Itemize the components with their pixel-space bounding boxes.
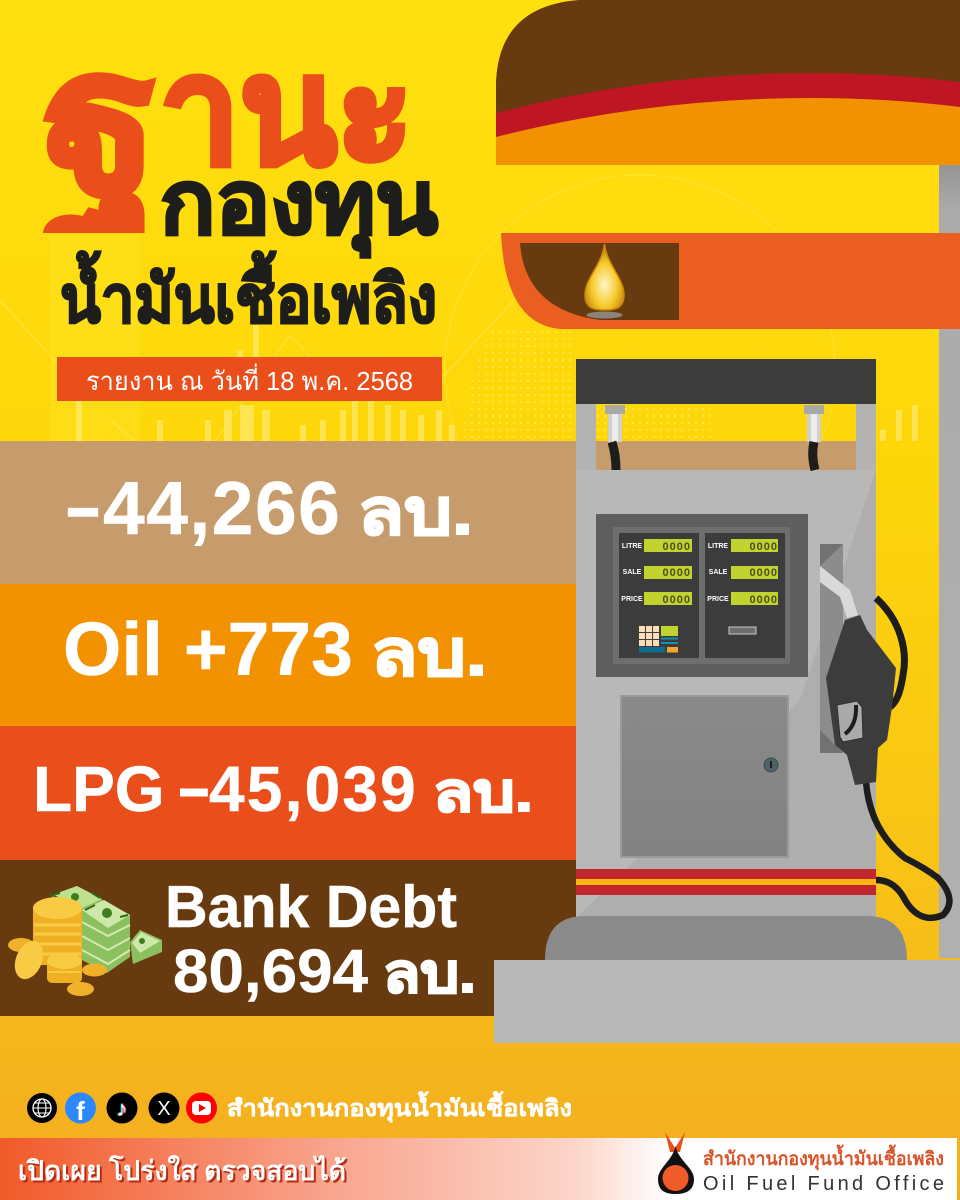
panel: bank debt: Bank Debt xyxy=(165,874,457,940)
display panel: LITRE xyxy=(622,543,642,550)
hose connectors xyxy=(605,405,824,470)
display panel: SALE xyxy=(709,569,728,576)
display panel: PRICE xyxy=(707,596,729,603)
logo: oil drop and flame xyxy=(658,1132,694,1194)
logo: Thai name: สำนักงานกองทุนน้ำมันเชื้อเพลิง xyxy=(703,1144,944,1171)
panel: net fund status xyxy=(0,441,576,584)
slogan: เปิดเผย โปร่งใส ตรวจสอบได้ xyxy=(20,1156,348,1188)
cabinet door xyxy=(621,696,788,857)
icon: website xyxy=(27,1093,57,1123)
title word: status xyxy=(42,72,406,233)
display panel: 0000 xyxy=(663,541,691,553)
pump cap xyxy=(576,359,876,404)
display panel: SALE xyxy=(623,569,642,576)
display panel: 0000 xyxy=(750,594,778,606)
panel: LPG account: 45,039 xyxy=(209,753,418,825)
panel: bank debt xyxy=(0,860,576,1016)
date badge xyxy=(57,357,442,401)
panel: oil account: ลบ. xyxy=(371,617,487,689)
panel: bank debt: 80,694 xyxy=(173,937,368,1005)
date badge: รายงาน ณ วันที่ 18 พ.ค. 2568 xyxy=(86,363,413,396)
stripes xyxy=(576,869,876,895)
title word: fund: กองทุน xyxy=(160,153,438,258)
icon: X: X xyxy=(157,1098,171,1120)
icon: money and coins xyxy=(8,886,162,996)
panel: LPG account xyxy=(0,726,576,860)
pump back panel xyxy=(596,441,856,471)
icon: tiktok: ♪ xyxy=(118,1096,128,1121)
display panel: 0000 xyxy=(663,567,691,579)
icon: facebook: f xyxy=(76,1096,85,1126)
icon: facebook xyxy=(65,1092,96,1126)
canopy roof xyxy=(496,0,960,165)
panel: oil account: Oil +773 xyxy=(63,607,353,691)
icon: tiktok: ♪ xyxy=(116,1096,126,1121)
panel: LPG account: – xyxy=(180,761,208,817)
display panel: 0000 xyxy=(750,541,778,553)
display panel: PRICE xyxy=(621,596,643,603)
slogan: เปิดเผย โปร่งใส ตรวจสอบได้ xyxy=(18,1154,346,1186)
icon: tiktok: ♪ xyxy=(116,1096,128,1121)
panel: bank debt: ลบ. xyxy=(383,944,476,1004)
title word: status: านะ xyxy=(160,27,413,195)
panel: net fund status: 44,266 xyxy=(103,466,341,550)
display panel: 0000 xyxy=(750,567,778,579)
display panel: LITRE xyxy=(708,543,728,550)
footer bar xyxy=(0,1132,957,1200)
logo: English name: Oil Fuel Fund Office xyxy=(703,1173,944,1195)
sign board with oil drop xyxy=(501,233,960,329)
agency name: สำนักงานกองทุนน้ำมันเชื้อเพลิง xyxy=(227,1091,572,1123)
title xyxy=(42,72,439,324)
panel: net fund status: – xyxy=(68,479,98,539)
pump body xyxy=(576,404,876,918)
display panel xyxy=(596,514,808,677)
keypad xyxy=(639,626,678,652)
title word: status: ฐ xyxy=(42,8,160,255)
title word: fuel oil: น้ำมันเชื้อเพลิง xyxy=(60,250,437,336)
social row xyxy=(27,1091,572,1126)
icon: X xyxy=(148,1092,180,1124)
icon: tiktok xyxy=(106,1092,138,1124)
display panel: 0000 xyxy=(663,594,691,606)
panel: LPG account: ลบ. xyxy=(433,763,533,823)
panel: oil account xyxy=(0,584,576,726)
right support pole xyxy=(939,165,960,958)
fuel nozzle and hose xyxy=(820,544,949,918)
icon: youtube xyxy=(186,1092,217,1124)
fuel pump xyxy=(494,359,960,1043)
panel: net fund status: ลบ. xyxy=(358,476,473,548)
panel: LPG account: LPG xyxy=(33,753,165,825)
pump base xyxy=(494,916,960,1043)
icon: oil drop xyxy=(585,244,624,318)
